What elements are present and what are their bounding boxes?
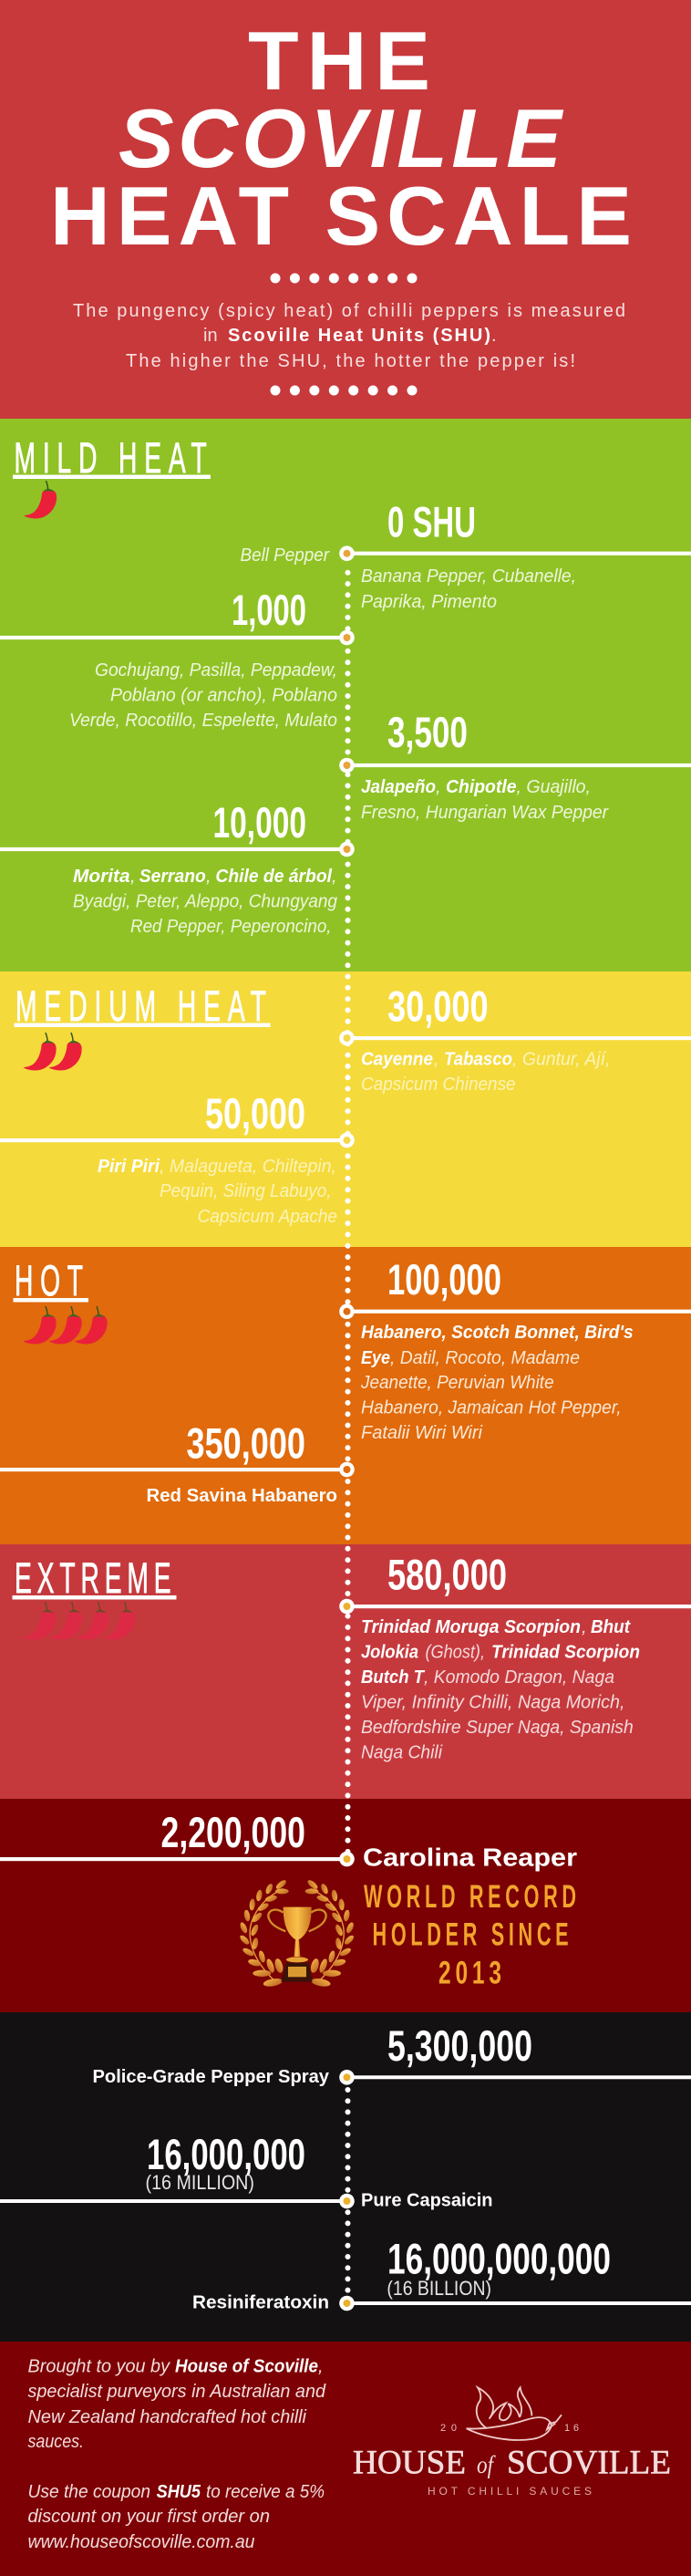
- text: morita list: Morita: [73, 866, 130, 887]
- marker: 350,000: [0, 1418, 355, 1477]
- text: red savina: Red Savina Habanero: [146, 1486, 337, 1506]
- intro text: [73, 301, 625, 371]
- text: habanero list: Jeanette, Peruvian White: [360, 1372, 554, 1393]
- logo: house of scoville: HOT CHILLI SAUCES: [428, 2485, 592, 2498]
- panel: hot background: [0, 1247, 691, 1544]
- marker: 5,300,000: [339, 2021, 691, 2085]
- title: THE: [248, 16, 430, 108]
- text: jalapeno list: [361, 776, 609, 823]
- text: morita list: Red Pepper, Peperoncino,: [130, 916, 332, 937]
- text: morita list: ,: [130, 866, 136, 887]
- marker: 580,000: 580,000: [387, 1551, 507, 1598]
- marker: 16,000,000,000: [339, 2234, 691, 2311]
- text: footer credit: House of Scoville: [175, 2355, 318, 2376]
- intro text: The higher the SHU, the hotter the pepper is!: [126, 351, 575, 371]
- icon: flaming chilli outline: [467, 2387, 562, 2440]
- marker: 10,000: 10,000: [213, 798, 306, 847]
- marker: 16,000,000: [0, 2130, 355, 2208]
- text: footer credit: sauces.: [27, 2431, 84, 2452]
- logo: house of scoville: SCOVILLE: [507, 2444, 671, 2481]
- text: cayenne list: ,: [434, 1049, 439, 1070]
- text: footer credit: to receive a 5%: [206, 2481, 325, 2502]
- marker: 30,000: [339, 982, 691, 1045]
- text: footer credit: www.houseofscoville.com.au: [27, 2531, 255, 2552]
- text: world record: HOLDER SINCE: [372, 1917, 569, 1953]
- text: trinidad list: Viper, Infinity Chilli, Naga Morich,: [361, 1692, 625, 1713]
- text: cayenne list: [361, 1049, 611, 1095]
- marker: 16,000,000: (16 MILLION): [146, 2171, 254, 2194]
- panel: footer background: [0, 2342, 691, 2576]
- text: pure capsaicin: Pure Capsaicin: [361, 2190, 492, 2210]
- text: habanero list: Eye: [361, 1347, 390, 1368]
- text: world record: 2013: [438, 1956, 501, 1991]
- text: footer credit: ,: [318, 2355, 324, 2376]
- panel: medium heat background: [0, 971, 691, 1247]
- text: gochujang list: Gochujang, Pasilla, Peppadew,: [95, 660, 337, 680]
- text: jalapeno list: ,: [436, 776, 441, 797]
- text: jalapeno list: Jalapeño: [361, 776, 436, 797]
- marker: 50,000: 50,000: [205, 1089, 305, 1137]
- text: morita list: Serrano: [139, 866, 206, 887]
- panel: mild heat background: [0, 419, 691, 971]
- text: cayenne list: Cayenne: [361, 1049, 433, 1070]
- icon: three chillies: [24, 1306, 108, 1344]
- marker: 3,500: 3,500: [387, 708, 468, 756]
- text: jalapeno list: Chipotle: [446, 776, 516, 797]
- text: piri piri list: Piri Piri: [98, 1156, 160, 1177]
- text: gochujang list: Verde, Rocotillo, Espelette, Mulato: [69, 710, 337, 731]
- dotted divider bottom: [275, 385, 413, 396]
- text: piri piri list: Pequin, Siling Labuyo,: [160, 1180, 332, 1201]
- heading: mild heat: MILD HEAT: [15, 435, 207, 483]
- text: trinidad list: Naga Chili: [361, 1741, 443, 1762]
- text: banana pepper list: [361, 566, 576, 612]
- panel: title header: [0, 0, 691, 419]
- text: cayenne list: Capsicum Chinense: [361, 1074, 516, 1095]
- marker: 1,000: 1,000: [232, 586, 306, 634]
- heading: hot: HOT: [15, 1258, 83, 1305]
- dotted divider top: [275, 274, 413, 283]
- text: piri piri list: Capsicum Apache: [198, 1206, 337, 1227]
- logo: house of scoville: 16: [564, 2423, 579, 2434]
- text: jalapeno list: Fresno, Hungarian Wax Pepper: [361, 802, 609, 823]
- marker: 2,200,000: 2,200,000: [160, 1808, 305, 1856]
- text: footer credit: New Zealand handcrafted hot chilli: [27, 2406, 307, 2427]
- text: police grade pepper spray: Police-Grade Pepper Spray: [93, 2067, 330, 2087]
- text: piri piri list: , Malagueta, Chiltepin,: [160, 1156, 336, 1177]
- panel: record background: [0, 1799, 691, 2012]
- marker: 0 SHU: 0 SHU: [387, 498, 476, 546]
- marker: 580,000: [339, 1551, 691, 1614]
- marker: 10,000: [0, 798, 355, 857]
- text: cayenne list: Tabasco: [444, 1049, 512, 1070]
- marker: 350,000: 350,000: [186, 1418, 305, 1467]
- marker: 100,000: 100,000: [387, 1255, 501, 1304]
- marker: 3,500: [339, 708, 691, 773]
- intro text: The pungency (spicy heat) of chilli peppers is measured: [73, 301, 625, 321]
- text: bell pepper: Bell Pepper: [241, 545, 330, 566]
- text: trinidad list: ,: [582, 1616, 587, 1637]
- marker: 16,000,000: 16,000,000: [147, 2130, 305, 2178]
- title: HEAT SCALE: [50, 171, 632, 263]
- text: morita list: ,: [206, 866, 211, 887]
- intro text: .: [491, 326, 497, 346]
- text: world record: [364, 1880, 576, 1991]
- text: habanero list: Fatalii Wiri Wiri: [361, 1422, 483, 1443]
- text: banana pepper list: Paprika, Pimento: [361, 591, 497, 612]
- text: cayenne list: , Guntur, Ají,: [512, 1049, 611, 1070]
- text: habanero list: Habanero, Scotch Bonnet, Bird's: [361, 1322, 634, 1343]
- intro text: in: [203, 326, 218, 346]
- title: [50, 16, 632, 263]
- marker: 0 SHU: [339, 498, 691, 561]
- text: footer credit: discount on your first order on: [27, 2506, 270, 2527]
- text: trinidad list: Jolokia: [361, 1642, 418, 1662]
- panel: beyond peppers background: [0, 2012, 691, 2342]
- text: footer credit: specialist purveyors in Australian and: [27, 2381, 326, 2402]
- text: morita list: Byadgi, Peter, Aleppo, Chungyang: [73, 890, 338, 912]
- text: footer credit: SHU5: [157, 2481, 201, 2502]
- dotted scale line upper: [345, 573, 350, 1854]
- text: gochujang list: Poblano (or ancho), Poblano: [110, 685, 337, 706]
- marker: 100,000: [339, 1255, 691, 1319]
- heading: extreme: EXTREME: [15, 1555, 171, 1603]
- text: trinidad list: , Komodo Dragon, Naga: [424, 1667, 614, 1688]
- text: habanero list: , Datil, Rocoto, Madame: [390, 1347, 580, 1368]
- heading: medium heat: MEDIUM HEAT: [15, 983, 266, 1031]
- title: SCOVILLE: [119, 93, 563, 185]
- text: trinidad list: [361, 1616, 640, 1762]
- icon: four chillies: [23, 1602, 135, 1639]
- text: jalapeno list: , Guajillo,: [516, 776, 591, 797]
- logo: house of scoville: [353, 2387, 671, 2498]
- panel: extreme background: [0, 1544, 691, 1799]
- text: footer credit: [27, 2355, 326, 2552]
- marker: 16,000,000,000: (16 BILLION): [387, 2277, 491, 2300]
- marker: 5,300,000: 5,300,000: [387, 2021, 532, 2070]
- text: trinidad list: Butch T: [361, 1667, 425, 1688]
- logo: house of scoville: HOUSE: [353, 2444, 466, 2481]
- marker: 30,000: 30,000: [387, 982, 489, 1031]
- text: footer credit: Brought to you by: [27, 2355, 171, 2376]
- icon: two chillies: [24, 1033, 82, 1070]
- text: piri piri list: [98, 1156, 337, 1227]
- text: carolina reaper: Carolina Reaper: [363, 1843, 577, 1872]
- text: trinidad list: Trinidad Moruga Scorpion: [361, 1616, 581, 1637]
- text: world record: WORLD RECORD: [364, 1880, 576, 1915]
- text: habanero list: [360, 1322, 634, 1443]
- text: banana pepper list: Banana Pepper, Cubanelle,: [361, 566, 576, 587]
- text: resiniferatoxin: Resiniferatoxin: [192, 2292, 329, 2312]
- text: trinidad list: Trinidad Scorpion: [491, 1642, 640, 1662]
- icon: trophy with laurel wreath: [239, 1878, 356, 1988]
- text: morita list: Chile de árbol: [215, 866, 333, 887]
- text: habanero list: Habanero, Jamaican Hot Pepper,: [361, 1397, 622, 1418]
- text: trinidad list: Bedfordshire Super Naga, Spanish: [361, 1717, 634, 1738]
- logo: house of scoville: of: [477, 2451, 496, 2478]
- text: morita list: ,: [332, 866, 337, 887]
- marker: 16,000,000,000: 16,000,000,000: [387, 2234, 611, 2282]
- dotted scale line lower: [345, 2090, 350, 2301]
- text: footer credit: Use the coupon: [27, 2481, 150, 2502]
- text: trinidad list: (Ghost),: [425, 1642, 485, 1662]
- text: morita list: [73, 866, 338, 937]
- marker: 50,000: [0, 1089, 355, 1148]
- logo: house of scoville: 20: [440, 2423, 457, 2434]
- text: trinidad list: Bhut: [591, 1616, 631, 1637]
- text: gochujang list: [69, 660, 337, 731]
- marker: 2,200,000: [0, 1808, 355, 1866]
- intro text: Scoville Heat Units (SHU): [228, 326, 490, 346]
- icon: one chilli: [24, 481, 57, 518]
- marker: 1,000: [0, 586, 355, 645]
